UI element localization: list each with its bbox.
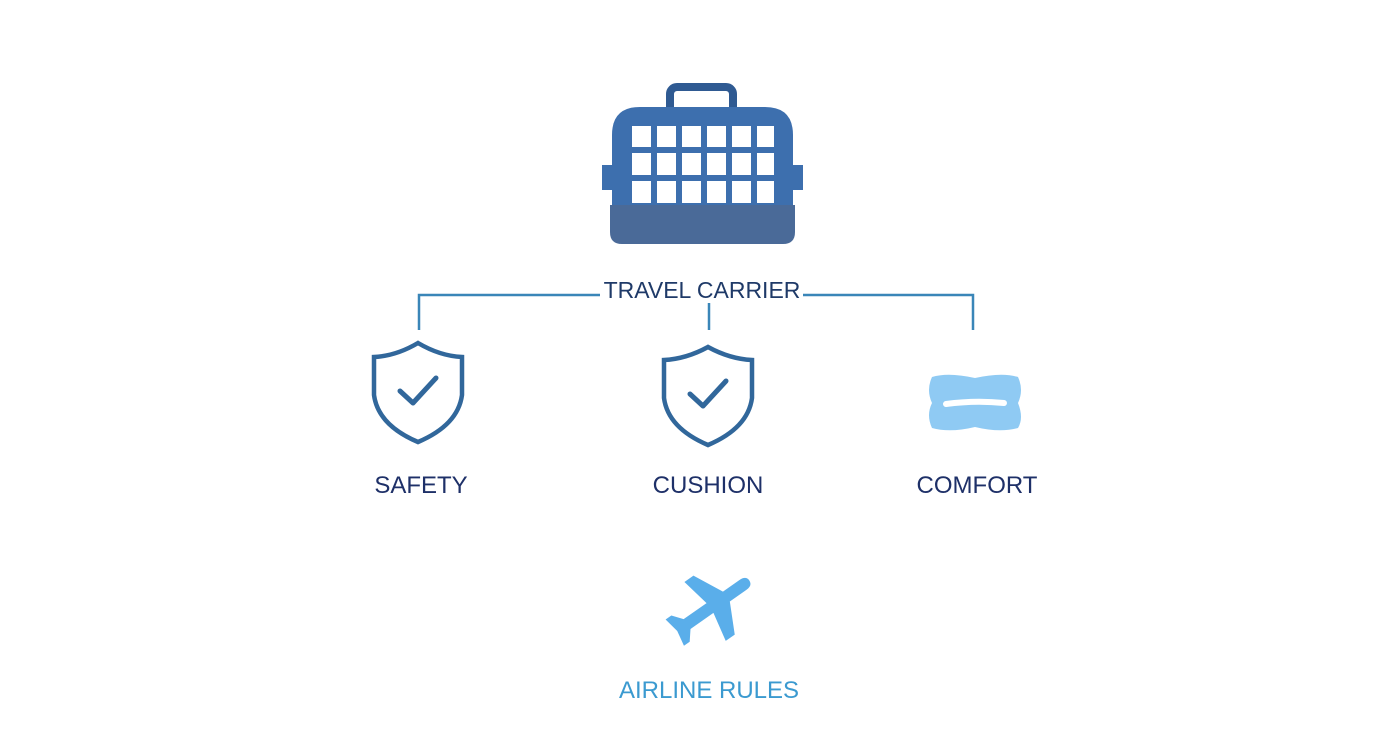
label: safety: SAFETY xyxy=(374,472,468,499)
heading: travel carrier: TRAVEL CARRIER xyxy=(604,277,800,303)
icon: airplane xyxy=(654,551,770,662)
connector lines xyxy=(419,295,973,330)
icon: travel carrier xyxy=(602,87,803,244)
icon: safety shield xyxy=(374,343,462,442)
label: cushion: CUSHION xyxy=(653,472,763,499)
icon: pillow xyxy=(929,375,1021,430)
label: airline rules: AIRLINE RULES xyxy=(619,677,799,704)
label: comfort: COMFORT xyxy=(917,472,1038,499)
icon: cushion shield xyxy=(664,347,752,445)
